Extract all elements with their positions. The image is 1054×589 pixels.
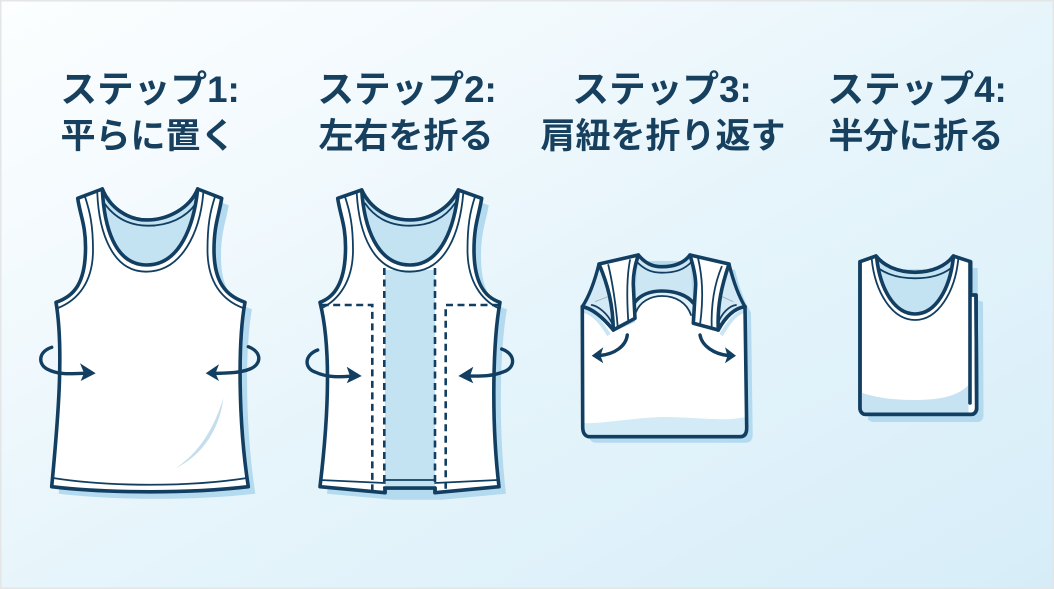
title: step 4: ステップ4: (827, 69, 1007, 110)
body (583, 296, 747, 437)
neck opening (634, 255, 694, 318)
neck opening (877, 258, 953, 314)
arrow: right (700, 335, 736, 363)
title: step 2: 左右を折る (318, 117, 494, 156)
illustration: step 1 flat tank top (41, 189, 259, 499)
neck opening (362, 190, 458, 265)
arrow: right fold (458, 349, 513, 383)
bottom shade (584, 417, 745, 435)
title: step 1: ステップ1: (60, 69, 240, 110)
illustration: step 3 straps folded back (582, 255, 753, 443)
arrow: left fold (307, 350, 362, 383)
fold edge (968, 262, 972, 403)
neck opening (102, 189, 198, 265)
title: step 2: ステップ2: (317, 69, 497, 110)
title: step 3: ステップ3: (572, 69, 752, 110)
title: step 1: 平らに置く (60, 117, 236, 156)
left strap (599, 255, 638, 330)
title: step 3: 肩紐を折り返す (540, 117, 786, 156)
shadow under straps (584, 311, 744, 335)
arrow: right fold (206, 347, 259, 381)
side folds (582, 264, 620, 330)
dashed fold lines (322, 268, 499, 490)
illustration: step 2 sides folded (307, 190, 513, 500)
bottom shade (862, 385, 968, 412)
illustration: step 4 folded in half (860, 256, 984, 422)
arch of the back (634, 291, 693, 315)
hem (320, 480, 498, 483)
arrow: left fold (41, 347, 96, 381)
right strap (690, 255, 729, 330)
exposed centre panel (385, 270, 435, 488)
crease highlight (176, 398, 223, 468)
arrow: left (592, 335, 627, 363)
title: step 4: 半分に折る (828, 117, 1004, 156)
